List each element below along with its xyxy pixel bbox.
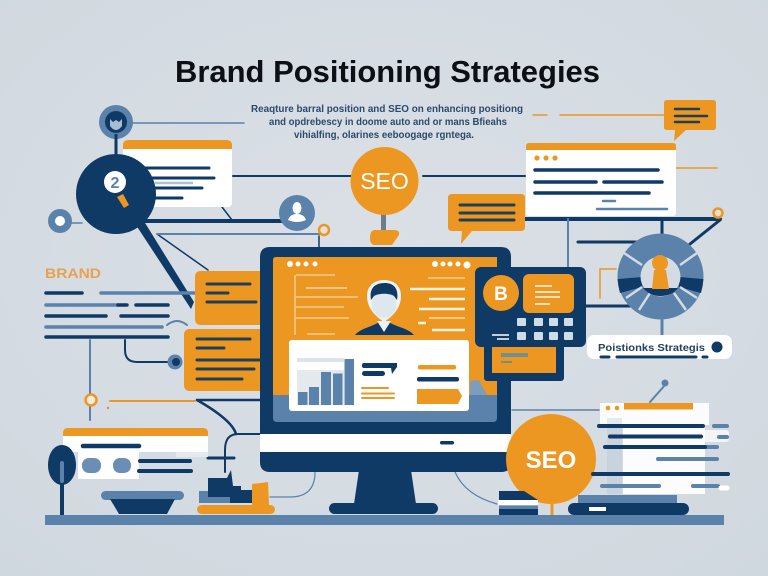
panel: tablet device: B bbox=[494, 284, 508, 305]
icon: microphone bbox=[48, 445, 76, 515]
icon: small node left bbox=[48, 209, 72, 233]
icon: user avatar bbox=[279, 195, 315, 231]
chart: segmented donut bbox=[618, 234, 704, 320]
title: Brand Positioning Strategies bbox=[175, 54, 600, 89]
panel: analytics card bbox=[289, 340, 469, 411]
icon: stacked books bbox=[498, 491, 538, 515]
screen bbox=[273, 257, 497, 422]
subtitle text block: Reaqture barral position and SEO on enhancing positiong bbox=[251, 103, 523, 115]
bar chart bbox=[297, 358, 354, 405]
panel: left BRAND text block: BRAND bbox=[45, 265, 101, 281]
subtitle text block: vihialfing, olarines eeboogage rgntega. bbox=[294, 129, 474, 141]
icon: top-left pin bbox=[99, 105, 133, 158]
panel: orange note one bbox=[195, 271, 260, 325]
badge: SEO top bbox=[350, 147, 418, 245]
subtitle text block: and opdrebescy in doome auto and or mans Bfieahs bbox=[269, 116, 507, 128]
icon: bowl bbox=[101, 491, 184, 514]
subtitle text block bbox=[251, 103, 523, 141]
badge: SEO lower bbox=[506, 414, 596, 515]
panel: search result card bbox=[123, 140, 232, 207]
icon: connector node bbox=[168, 354, 182, 370]
panel: left BRAND text block bbox=[45, 265, 195, 337]
icon: orange ring node lower left bbox=[86, 394, 109, 409]
panel: lower-left card bbox=[63, 428, 208, 479]
connector bar to user icon bbox=[145, 219, 285, 223]
panel: tablet device bbox=[475, 267, 586, 381]
icon: magnifying glass bbox=[76, 154, 194, 309]
icon: orange ring node bbox=[319, 225, 329, 235]
panel: orange note two bbox=[184, 329, 260, 391]
callout: centre speech bubble bbox=[448, 194, 525, 244]
label: positions strategies: Poistionks Strategis bbox=[598, 342, 705, 354]
icon: magnifying glass: 2 bbox=[111, 175, 120, 192]
badge: SEO lower: SEO bbox=[526, 447, 576, 474]
user portrait bbox=[355, 280, 414, 335]
illustration: desktop monitor bbox=[260, 247, 511, 472]
badge: SEO top: SEO bbox=[360, 168, 409, 194]
panel: top-right browser card bbox=[526, 143, 676, 216]
icon: orange ring node right bbox=[714, 208, 722, 218]
baseline shelf bbox=[45, 515, 724, 525]
icon: staircase with orange base bbox=[197, 470, 275, 514]
callout: top-right speech bubble bbox=[664, 100, 716, 141]
label: positions strategies bbox=[587, 335, 732, 359]
connector lines bbox=[69, 115, 720, 504]
icon: laptop bbox=[568, 495, 689, 515]
panel: lower-right document bbox=[593, 380, 729, 494]
illustration: monitor stand bbox=[329, 470, 438, 514]
